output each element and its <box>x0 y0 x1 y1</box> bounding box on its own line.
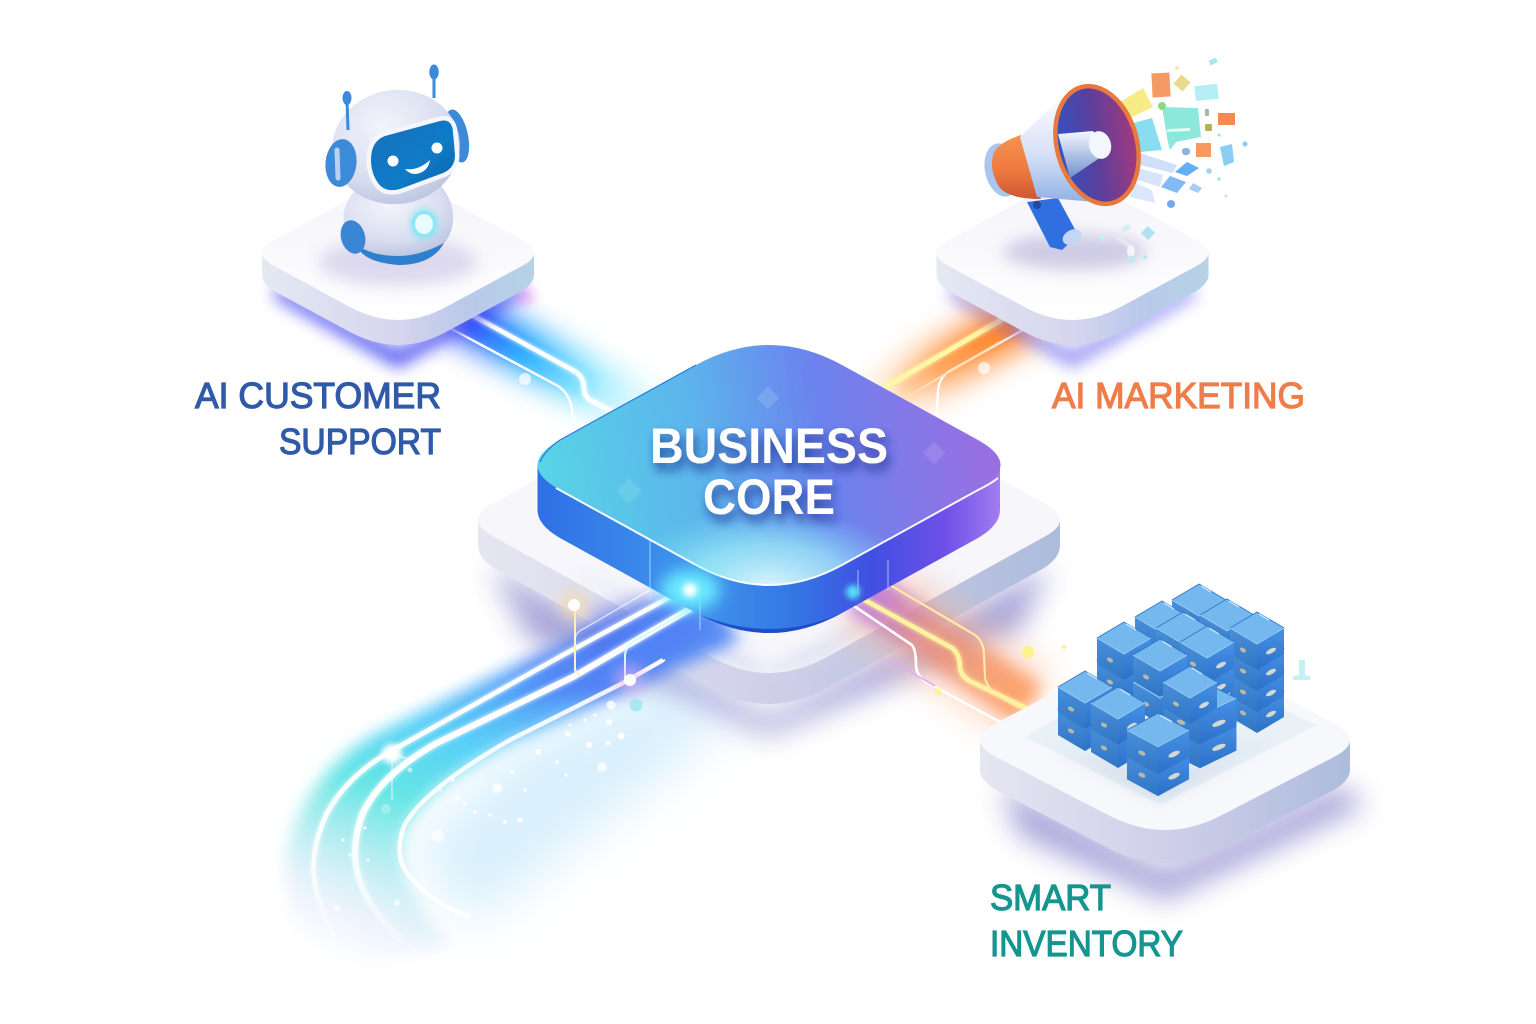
connector: pale glow under main flow <box>415 680 730 925</box>
icon: small pale marker <box>1293 660 1310 680</box>
connector: AI customer support beam <box>446 286 650 428</box>
base platform shadow <box>490 565 1050 735</box>
label line two: SUPPORT <box>279 421 441 462</box>
connector: AI marketing beam <box>875 317 1030 416</box>
connector: smart inventory beam <box>845 585 1066 722</box>
icon: stacked inventory boxes <box>1058 584 1284 796</box>
core node glows <box>660 570 860 610</box>
platform: smart inventory <box>980 650 1350 863</box>
label line one: SMART <box>990 877 1111 918</box>
AI marketing label: AI MARKETING <box>1052 375 1305 416</box>
label line two: INVENTORY <box>990 923 1183 964</box>
icon: megaphone <box>980 77 1151 250</box>
robot shadow on platform <box>318 238 478 286</box>
title line one: BUSINESS <box>650 418 888 474</box>
particles <box>334 698 642 911</box>
icon: confetti burst <box>1099 57 1248 263</box>
megaphone shadow on platform <box>1003 234 1147 270</box>
light flares <box>382 593 644 800</box>
platform: AI marketing <box>936 186 1208 345</box>
robot platform glow <box>275 285 520 368</box>
title line two: CORE <box>703 469 835 525</box>
label line one: AI CUSTOMER <box>195 375 441 416</box>
smart inventory label <box>990 877 1183 964</box>
connector: main data flow <box>286 585 740 975</box>
central base platform <box>478 367 1060 704</box>
inventory platform shadow <box>1000 785 1365 900</box>
core title <box>650 418 888 525</box>
marketing platform glow <box>950 285 1195 368</box>
icon: robot <box>323 64 473 265</box>
AI customer support label <box>195 375 441 462</box>
central core block <box>538 345 1000 633</box>
platform: AI customer support <box>262 186 534 345</box>
